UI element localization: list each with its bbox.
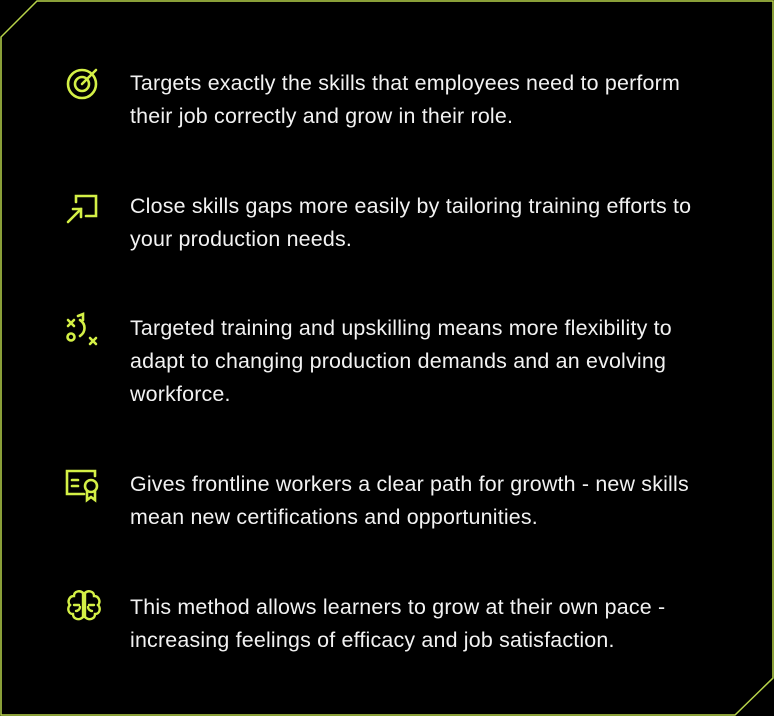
text: own pace: increasing feelings of efficacy and job satisfaction. [130, 628, 615, 652]
text: close skills gaps [130, 194, 691, 251]
icon: strategy [66, 312, 98, 346]
text: targets skills [130, 71, 680, 128]
text: close skills gaps: Close skills gaps more easily by tailoring training efforts to [130, 194, 691, 218]
icon: certificate [66, 470, 98, 503]
text: flexibility: adapt to changing production demands and an evolving [130, 349, 666, 373]
text: flexibility [130, 316, 672, 406]
icon: expand arrow [66, 194, 98, 224]
text: own pace: This method allows learners to grow at their own pace - [130, 595, 665, 619]
icon: brain [67, 590, 101, 620]
text: flexibility: workforce. [130, 382, 231, 406]
text: targets skills: their job correctly and grow in their role. [130, 104, 513, 128]
icon: target [66, 68, 98, 100]
text: growth path: mean new certifications and opportunities. [130, 505, 538, 529]
text: own pace [130, 595, 665, 652]
text: growth path: Gives frontline workers a clear path for growth - new skills [130, 472, 689, 496]
text: growth path [130, 472, 689, 529]
text: targets skills: Targets exactly the skills that employees need to perform [130, 71, 680, 95]
text: close skills gaps: your production needs. [130, 227, 352, 251]
text: flexibility: Targeted training and upskilling means more flexibility to [130, 316, 672, 340]
